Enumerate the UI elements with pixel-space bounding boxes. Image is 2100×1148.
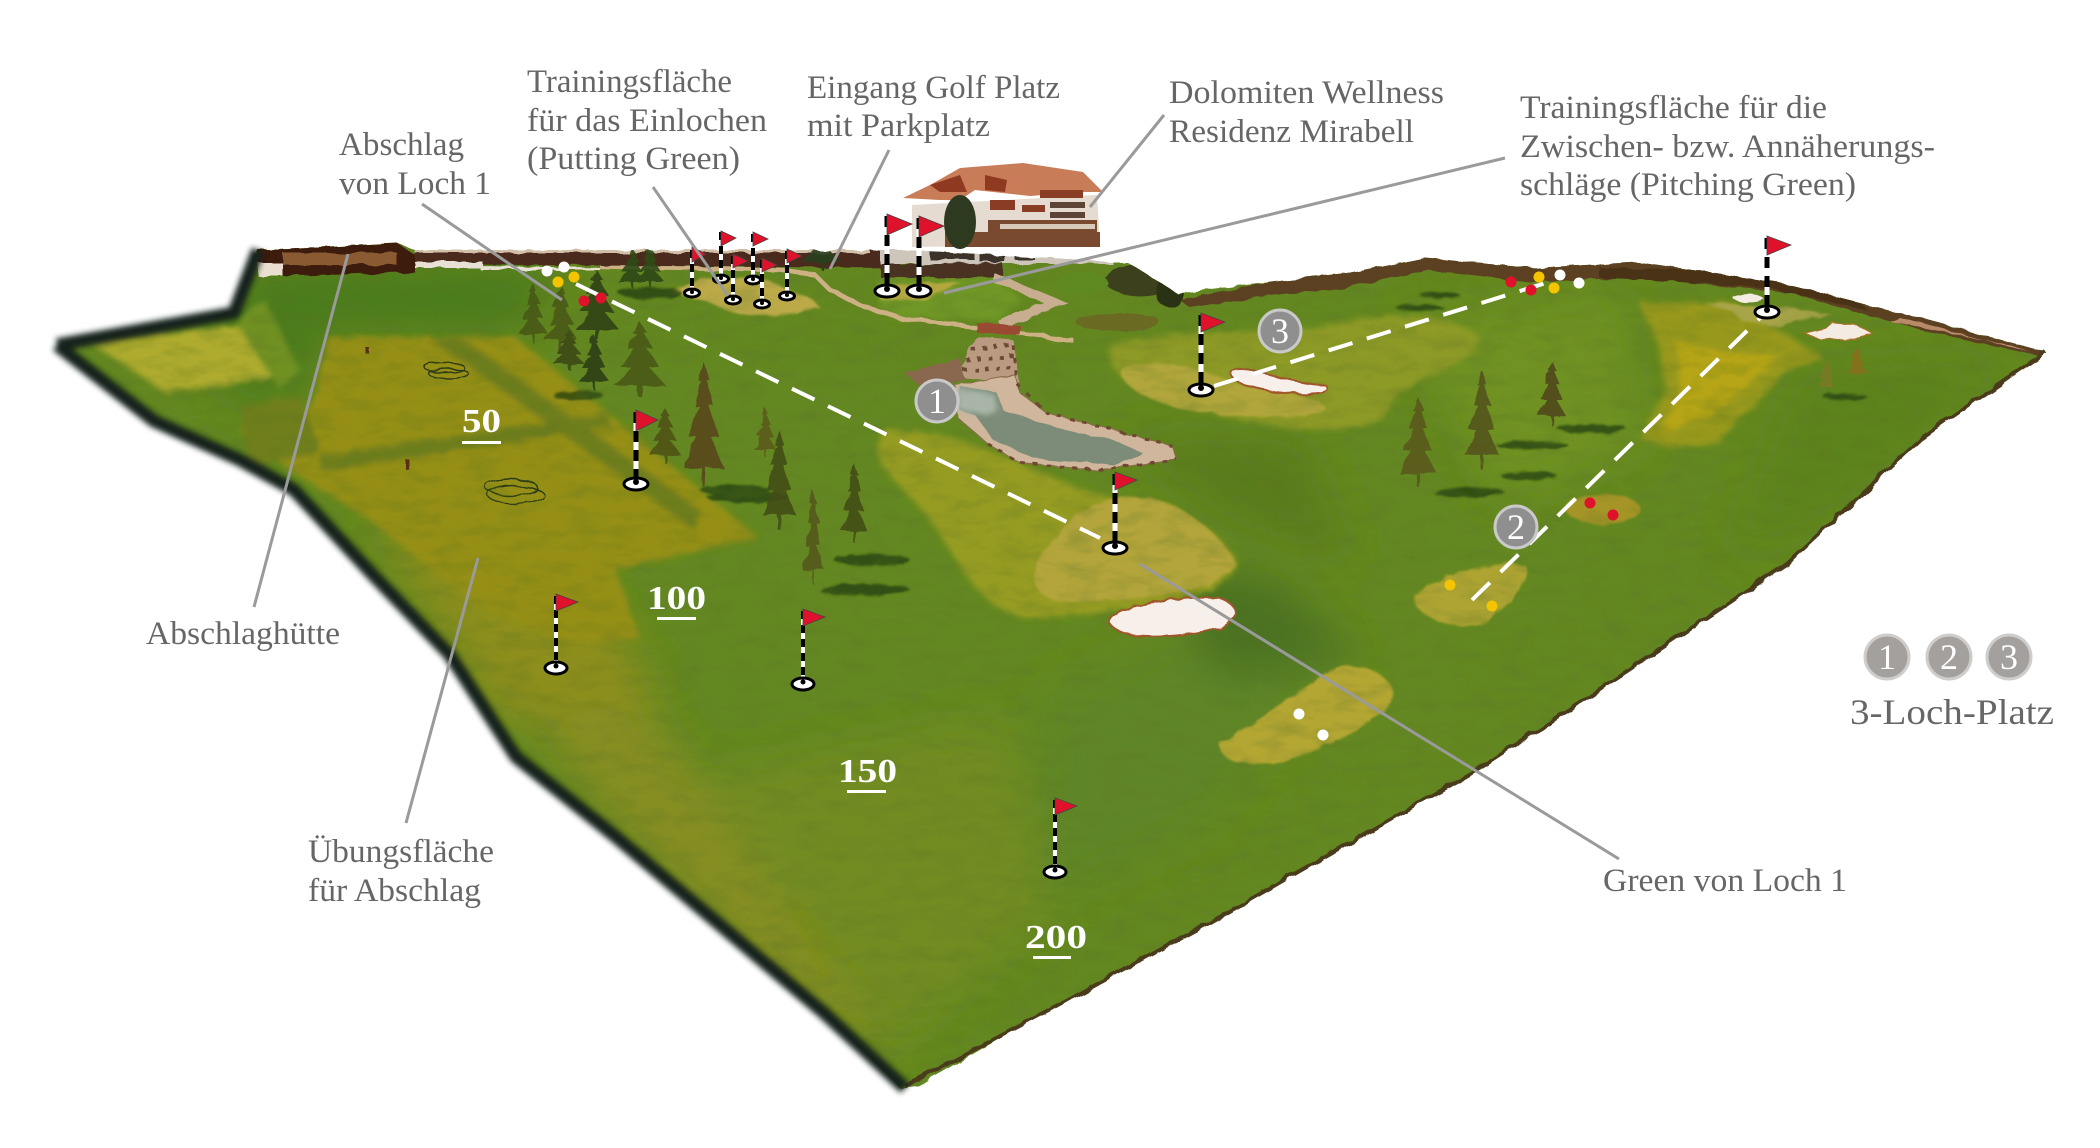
- label: Eingang Golf Platz: Eingang Golf Platz: [807, 70, 1060, 106]
- label: Pitching Green: Trainingsfläche für die: [1520, 90, 1827, 126]
- hole number badges: 3: [1271, 311, 1289, 351]
- legend: 3-Loch-Platz: 3-Loch-Platz: [1850, 692, 2054, 732]
- flags: [545, 214, 1791, 878]
- hole number badges: 2: [1507, 507, 1525, 547]
- label: Putting Green: Trainingsfläche: [527, 64, 732, 100]
- leader lines: [254, 115, 1619, 859]
- bushes beside hotel: [1076, 265, 1184, 332]
- label: Putting Green: [527, 64, 767, 177]
- brown fence edge lower right: [905, 352, 2046, 1086]
- label: Pitching Green: [1520, 90, 1935, 203]
- stream stones: [993, 277, 1056, 325]
- bridge: [977, 323, 1020, 335]
- label: Übungsfläche für Abschlag: [308, 834, 494, 909]
- distance markers: 200: [1025, 919, 1087, 956]
- label: Eingang Golf Platz: mit Parkplatz: [807, 108, 990, 144]
- dashed route hole 1: [576, 284, 1100, 538]
- cart path: [600, 267, 1073, 340]
- label: Pitching Green: Zwischen- bzw. Annäherungs-: [1520, 129, 1935, 165]
- tree shadows: [553, 287, 1867, 596]
- wall belt behind fairway 3: [1180, 254, 2046, 356]
- dashed route hole 2: [1472, 318, 1760, 600]
- bunkers: [1109, 598, 1235, 637]
- label: Dolomiten Wellness Residenz Mirabell: Residenz Mirabell: [1169, 114, 1414, 150]
- label: Abschlag von Loch 1: [339, 127, 491, 202]
- label: Dolomiten Wellness Residenz Mirabell: Dolomiten Wellness: [1169, 75, 1444, 111]
- range targets: [367, 347, 544, 504]
- driving range: [87, 300, 758, 640]
- tee markers: [542, 262, 1618, 740]
- parking lot and wall below hotel: [880, 248, 1113, 264]
- grass texture: [98, 246, 1858, 1087]
- label: Green von Loch 1: Green von Loch 1: [1603, 863, 1847, 899]
- distance markers: 100: [647, 580, 706, 617]
- label: Abschlag von Loch 1: Abschlag: [339, 127, 464, 163]
- legend: 3-Loch-Platz: 3: [2000, 637, 2018, 677]
- greens and tees: [672, 278, 1833, 764]
- upper wall and hedge: [415, 248, 900, 268]
- distance markers: 150: [838, 753, 897, 790]
- legend: 3-Loch-Platz: [1850, 635, 2054, 732]
- course terrain: [40, 220, 2060, 1100]
- trees: [518, 220, 1867, 584]
- label: Übungsfläche für Abschlag: Übungsfläche: [308, 834, 494, 870]
- distance markers: 50: [462, 403, 501, 440]
- distance markers: [462, 403, 1087, 959]
- label: Übungsfläche für Abschlag: für Abschlag: [308, 873, 481, 909]
- golf course map: [40, 163, 2060, 1100]
- hole number badges: [916, 310, 1537, 548]
- label: Dolomiten Wellness Residenz Mirabell: [1169, 75, 1444, 150]
- label: Abschlag von Loch 1: von Loch 1: [339, 166, 491, 202]
- label: Pitching Green: schläge (Pitching Green): [1520, 167, 1856, 203]
- light fairways: [877, 277, 1823, 618]
- label: Putting Green: für das Einlochen: [527, 103, 767, 139]
- hotel building: [903, 163, 1103, 249]
- label: Abschlaghütte: Abschlaghütte: [146, 616, 340, 652]
- dark lower-left embankment: [57, 250, 905, 1088]
- legend: 3-Loch-Platz: 2: [1940, 637, 1958, 677]
- hole number badges: 1: [928, 381, 946, 421]
- tee-off hut: [258, 243, 415, 276]
- label: Eingang Golf Platz: [807, 70, 1060, 144]
- legend: 3-Loch-Platz: 1: [1878, 637, 1896, 677]
- dashed route hole 3: [1214, 282, 1549, 386]
- pond: [955, 375, 1177, 470]
- shaded grass areas: [190, 265, 2000, 1060]
- label: Putting Green: (Putting Green): [527, 141, 740, 177]
